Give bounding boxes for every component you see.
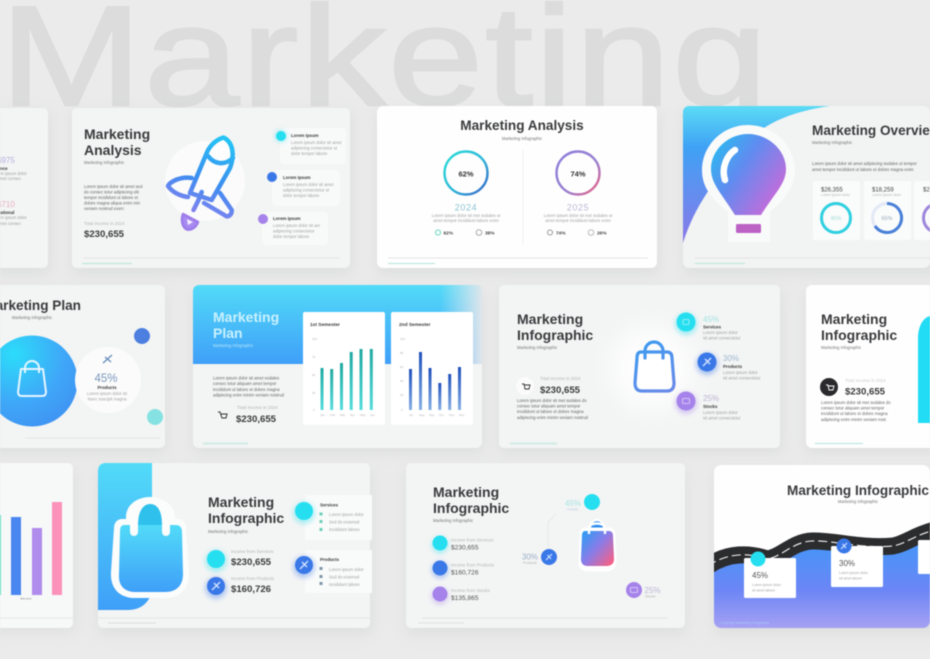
node: 30 percent: Products: [523, 561, 537, 565]
body text: incididunt ut labore et dolore magna: [821, 411, 888, 416]
chart: second semester: 2nd Semester: [399, 322, 431, 328]
stat: products income: $160,726: [231, 584, 271, 595]
chart: second semester: 20: [400, 393, 404, 397]
node: stocks: 25%: [703, 394, 719, 403]
ring chart 2024: 2024: [455, 202, 477, 212]
stat: services income: Income from Services: [231, 549, 274, 554]
product stat: Lorem ipsum dolor sit: [87, 391, 128, 396]
panel: marketing plan bar charts: [193, 285, 482, 448]
chart: second semester: 40: [400, 379, 404, 383]
callout 30 percent: Lorem ipsum dolor: [839, 571, 869, 575]
chart: first semester: 25: [312, 391, 316, 395]
panel: cropped slide left row 1: [0, 108, 48, 268]
node: 25 percent: Stocks: [645, 594, 656, 598]
body text: Lorem ipsum dolor sit met sodales do: [517, 398, 587, 403]
subtitle: Marketing Infographic: [502, 136, 542, 141]
list: products: Incididunt labore: [329, 582, 360, 587]
node: products: Products: [723, 364, 743, 369]
stat card 1: 45%: [830, 216, 842, 222]
cyan shape: [918, 316, 930, 423]
stat: products income: Income from Products: [231, 576, 275, 581]
blue swoosh: [683, 106, 830, 243]
icon: shopping bag: [610, 326, 694, 410]
list item 1: Lorem ipsum dolor sit amet: [291, 140, 342, 145]
panel: marketing infographic white: [806, 285, 930, 448]
body text: veniam nostrud exerc: [84, 206, 124, 211]
chart: first semester: Apr: [350, 413, 355, 417]
panel: marketing analysis rocket: [72, 108, 350, 268]
list item 3: Lorem ipsum dolor sit am: [273, 223, 321, 228]
total income with cart: Total Income in 2024: [845, 378, 886, 383]
callout 45 percent: [744, 552, 796, 598]
chart: second semester: Oct: [439, 413, 444, 417]
chart: first semester: 0: [313, 408, 315, 412]
panel: cropped bar chart: [0, 463, 73, 628]
node: products: Lorem ipsum dolor: [723, 370, 758, 375]
heading: Marketing: [517, 311, 583, 327]
body text: consec tetur aliquam amet tempor: [821, 406, 885, 410]
node: products: [696, 352, 761, 380]
total income with cart: $230,655: [540, 385, 581, 396]
gradient ground: [713, 544, 930, 628]
list: products: [293, 550, 372, 593]
node: services: Lorem ipsum dolor: [703, 330, 738, 335]
ring chart 2025: Lorem ipsum dolor sit met sodales ut: [544, 213, 613, 218]
panel: marketing infographic big bag: [98, 463, 372, 628]
chart: second semester: 60: [400, 365, 404, 369]
node: services: Services: [703, 324, 722, 330]
stat card 2: [872, 186, 904, 234]
list item 3: adipiscing consectetur: [273, 228, 315, 234]
body text: incididunt ut labore et dolore magna: [517, 409, 584, 414]
list item 2: Lorem Ipsum: [283, 175, 311, 180]
ring chart 2024: [432, 152, 501, 236]
stat: stocks: Income from Stocks: [451, 588, 491, 593]
icon: blue dot: [134, 328, 150, 344]
list item 1: [275, 128, 346, 164]
panel: marketing infographic big bag: Marketing Infographic: [208, 529, 248, 534]
list: services: Lorem ipsum dolor: [329, 512, 364, 517]
callout 45 percent: Lorem ipsum dolor: [752, 583, 782, 587]
heading: Marketing: [208, 494, 274, 510]
panel: marketing plan circle: [0, 285, 165, 448]
panel shadows: [0, 112, 930, 634]
body text: consec tetur aliquam amet tempor: [213, 381, 277, 386]
chart: first semester: Mar: [340, 413, 345, 417]
chart: second semester: Sep: [429, 413, 435, 417]
stat card 2: Lorem ipsum dolor: [872, 193, 902, 197]
heading: Infographic: [517, 327, 593, 343]
big blue circle with bag icon: [0, 336, 78, 426]
chart: second semester: Nov: [449, 413, 455, 417]
heading: Infographic: [433, 500, 509, 516]
panel: marketing infographic gradient bag: Marketing Infographic: [433, 518, 473, 523]
list item 2: adipiscing consectetur ut: [283, 188, 330, 192]
ring chart 2025: [544, 152, 613, 236]
body text: dolore magna aliqua enim min: [84, 200, 141, 206]
stat: products: $160,726: [451, 570, 479, 576]
panel: marketing infographic road: Marketing Infographic: [838, 499, 878, 504]
body text: adipiscing enim minim veniam nostrud: [213, 392, 285, 398]
stat card 3: [922, 186, 930, 232]
ring chart 2024: 62%: [458, 170, 474, 178]
chart: second semester: [391, 312, 473, 425]
subtitle: Marketing Infographic: [84, 160, 124, 165]
node: 45 percent: [565, 494, 600, 512]
product stat: Nunc suscipit magna: [88, 396, 127, 402]
list: products: Products: [320, 557, 340, 562]
ring chart 2025: 74%: [556, 230, 566, 236]
node: 45 percent: 45%: [565, 499, 581, 508]
panel: marketing plan bar charts: $230,655: [236, 414, 277, 425]
body text: do consec tetur adipiscing elit: [84, 190, 140, 194]
total income: Total Income in 2024: [84, 221, 125, 226]
stat card 1: Lorem ipsum dolor: [821, 193, 851, 197]
list item 1: dolor tempor labore: [291, 151, 328, 156]
node: products: 30%: [723, 354, 739, 363]
stat: services: Income from Services: [451, 538, 494, 542]
node: stocks: Lorem ipsum dolor: [703, 410, 738, 415]
heading: Marketing: [821, 311, 887, 327]
total income with cart: Total Income in 2024: [540, 376, 581, 381]
heading: Marketing: [213, 309, 279, 325]
ring chart 2025: 26%: [597, 230, 607, 236]
stat: products income: [205, 576, 275, 599]
panel: marketing analysis rings: [377, 106, 657, 268]
body text: tempor incididunt ut labore et: [84, 195, 139, 200]
icon: rocket: [165, 138, 245, 230]
heading: Marketing Infographic: [787, 483, 929, 498]
callout 45 percent: 45%: [752, 571, 768, 580]
total income with cart: [820, 378, 886, 398]
ring chart 2024: Lorem ipsum dolor sit met sodales ut: [432, 213, 501, 218]
list: products: Lorem ipsum dolor: [329, 567, 364, 572]
panel: marketing infographic bag: Marketing Infographic: [517, 345, 557, 350]
blue header: [193, 285, 482, 364]
heading: Infographic: [821, 327, 897, 343]
panel: marketing infographic bag: [499, 285, 780, 448]
chart: second semester: 80: [400, 351, 404, 355]
blue block: [98, 463, 152, 610]
icon: large bag: [111, 497, 189, 598]
icon: light bulb: [701, 124, 786, 234]
chart: first semester: Jun: [370, 413, 375, 417]
list item 3: Lorem Ipsum: [273, 216, 301, 221]
stat: stocks: [432, 586, 491, 604]
chart: first semester: 1st Semester: [310, 322, 340, 328]
icon: cart: [218, 412, 227, 418]
node: services: 45%: [703, 315, 719, 324]
chart: first semester: Jan: [320, 413, 325, 417]
node: products: sit amet consectetur: [723, 376, 761, 380]
panel: marketing plan circle: Marketing Infographic: [12, 315, 52, 320]
panel: marketing plan bar charts: Marketing Infographic: [213, 343, 253, 348]
panel: marketing overview: Marketing Infographic: [812, 140, 852, 145]
heading: Marketing Analysis: [460, 118, 584, 133]
body text: consec tetur aliquam amet tempor: [517, 404, 581, 408]
list: products: Sed do eiusmod: [329, 574, 360, 580]
node: services: [675, 312, 741, 340]
chart: second semester: 100: [400, 337, 405, 341]
list item 3: [258, 212, 328, 245]
chart: second semester: Aug: [419, 413, 425, 417]
list: services: [293, 495, 372, 540]
list item 1: adipiscing consectetur ut: [291, 146, 338, 150]
icon: cyan dot: [147, 409, 163, 425]
ring chart 2024: amet tempor incididunt labore enim: [433, 218, 499, 223]
stat card 1: $26,355: [821, 188, 843, 194]
list: services: Sed do eiusmod: [329, 520, 360, 524]
total income with cart: $230,655: [845, 386, 886, 398]
node: 45 percent: Growth: [567, 508, 578, 512]
chart: second semester: Dec: [459, 413, 465, 417]
stat card 2: $18,259: [872, 188, 894, 194]
node: 25 percent: [626, 582, 661, 598]
body text: adipiscing enim minim veniam nostrud: [517, 415, 589, 420]
product stat: Products: [97, 385, 117, 390]
node: stocks: sit amet consectetur: [703, 416, 741, 420]
chart: first semester: 100: [312, 337, 317, 341]
list item 1: Lorem Ipsum: [291, 133, 319, 138]
chart: second semester: Jul: [409, 413, 413, 417]
callout 45 percent: sit amet labore: [752, 588, 775, 592]
callout 30 percent: [831, 538, 883, 587]
body text: Lorem ipsum dolor sit amet sodales: [213, 376, 279, 380]
panel: marketing infographic white: Marketing Infographic: [821, 345, 861, 350]
callout 30 percent: sit amet labore: [839, 576, 862, 580]
icon: gradient bag: [580, 519, 615, 570]
panel: marketing overview: [683, 106, 930, 268]
body text: Lorem ipsum dolor sit amet adipiscing sodales ut tempor: [812, 161, 917, 166]
stat: services income: $230,655: [231, 557, 272, 568]
stat: products: Income from Products: [451, 562, 495, 568]
chart: first semester: May: [360, 413, 366, 417]
list item 2: dolor tempor labore: [283, 193, 320, 198]
body text: incididunt ut labore et dolore magna: [213, 387, 280, 392]
node: 25 percent: 25%: [644, 586, 661, 595]
panel: marketing infographic road: [708, 465, 930, 630]
stat card 1: [820, 186, 852, 234]
callout 30 percent: 30%: [839, 559, 855, 568]
ring chart 2024: 62%: [444, 230, 454, 236]
ring chart 2025: 2025: [567, 202, 589, 212]
chart: first semester: [303, 312, 385, 425]
total income: Total Income in 2024: [237, 405, 278, 410]
heading: Marketing: [433, 484, 499, 500]
body text: amet tempor incididunt ut labore et dolore magna enim: [812, 167, 914, 172]
list: services: Incididunt labore: [329, 527, 360, 532]
chart: first semester: 75: [312, 355, 316, 359]
ring chart 2025: amet tempor incididunt labore enim: [545, 218, 611, 223]
road: [708, 530, 930, 566]
panel: marketing analysis rocket: $230,655: [84, 229, 125, 240]
node: 30 percent: 30%: [522, 552, 538, 562]
heading: Plan: [213, 325, 243, 341]
product stat: 45%: [94, 373, 118, 385]
node: services: sit amet consectetur: [703, 336, 741, 340]
body text: adipiscing enim minim veniam nost: [821, 417, 887, 422]
stat card 2: 65%: [881, 216, 893, 222]
node: stocks: [675, 392, 741, 420]
chart: second semester: 0: [401, 408, 403, 412]
chart: first semester: Feb: [330, 413, 336, 417]
ring chart 2025: 74%: [570, 170, 586, 178]
stat: services: $230,655: [451, 544, 479, 552]
list: services: Services: [320, 502, 339, 508]
chart: first semester: 50: [312, 373, 316, 377]
callout cropped: [918, 540, 930, 574]
stat: products: [432, 560, 495, 578]
body text: Lorem ipsum dolor sit met sodales do: [821, 400, 891, 405]
body text: Lorem ipsum dolor sit amet sed: [84, 184, 143, 189]
heading: Infographic: [208, 510, 284, 526]
heading: Analysis: [84, 142, 142, 158]
list item 2: Lorem ipsum dolor sit amet: [283, 182, 334, 187]
list item 3: dolor tempor labore: [273, 234, 310, 239]
node: 30 percent: [522, 549, 557, 565]
panel: cropped bar chart: Element: [20, 596, 32, 600]
heading: Marketing: [84, 126, 150, 142]
ring chart 2024: 38%: [485, 230, 495, 236]
list item 2: [267, 170, 340, 206]
footer note: Copyright Marketing Infographic: [720, 621, 770, 625]
stat: stocks: $135,865: [451, 595, 479, 602]
node: stocks: Stocks: [703, 404, 718, 409]
stat: services income: [205, 549, 274, 572]
panel: marketing infographic gradient bag: [406, 463, 685, 628]
product stat: [75, 347, 141, 413]
stat: services: [432, 536, 494, 554]
total income with cart: [516, 376, 581, 396]
